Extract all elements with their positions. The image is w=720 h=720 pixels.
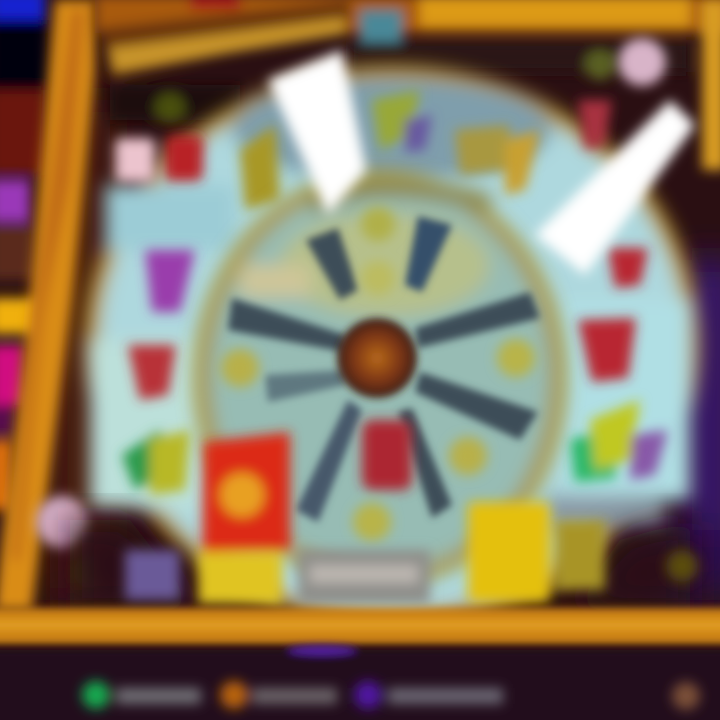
outer wheel <box>84 65 700 625</box>
inner wheel symbols <box>221 207 535 541</box>
white light beams <box>268 50 695 275</box>
bottom prize blocks <box>125 432 698 604</box>
bottom gold bar <box>0 608 720 644</box>
left edge decoration <box>0 0 45 510</box>
outer wheel symbols <box>115 38 668 495</box>
inner wheel <box>194 170 566 586</box>
inner wheel spokes <box>228 216 540 522</box>
bottom corner shade <box>70 520 690 610</box>
bottom dark footer <box>0 645 720 720</box>
left gold column <box>0 0 95 610</box>
background glow <box>50 100 720 600</box>
footer legend <box>82 681 700 710</box>
wheel hub <box>337 318 417 398</box>
top gold band <box>95 0 720 170</box>
left bottom ornaments <box>36 496 106 588</box>
